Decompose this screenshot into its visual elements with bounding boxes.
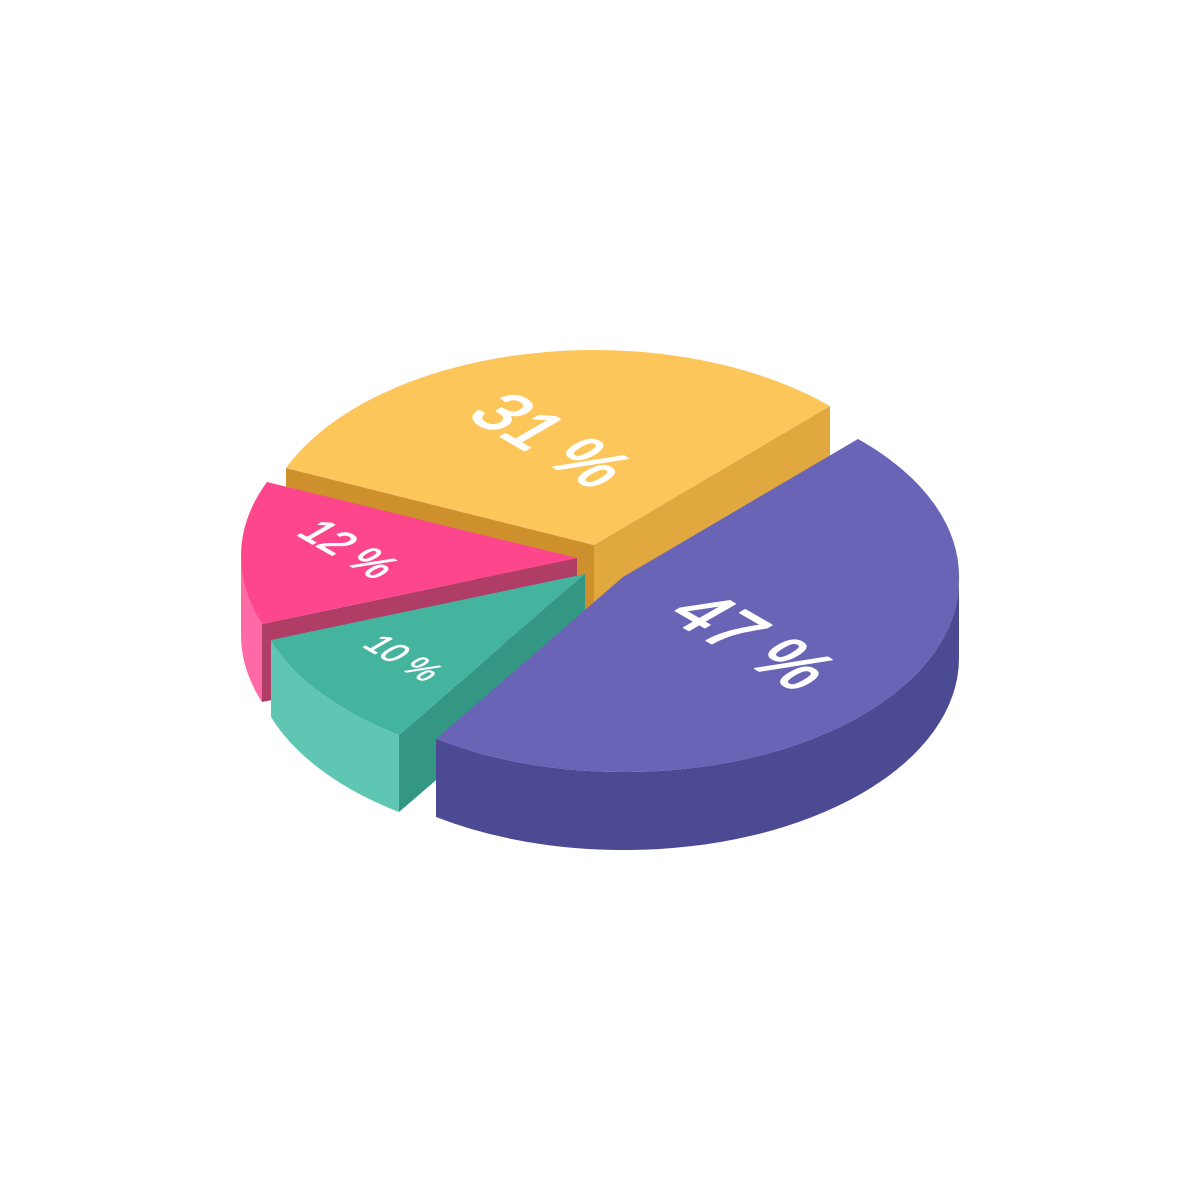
label: 10 %: 10 % [354,630,452,687]
label: 47 %: 47 % [649,582,855,701]
label: 31 %: 31 % [451,382,652,498]
slice: purple 47% [436,439,959,850]
label: 12 %: 12 % [286,513,411,585]
slice: yellow 31% [286,350,830,625]
slice: teal 10% [271,574,585,812]
slice: pink 12% [241,482,577,702]
